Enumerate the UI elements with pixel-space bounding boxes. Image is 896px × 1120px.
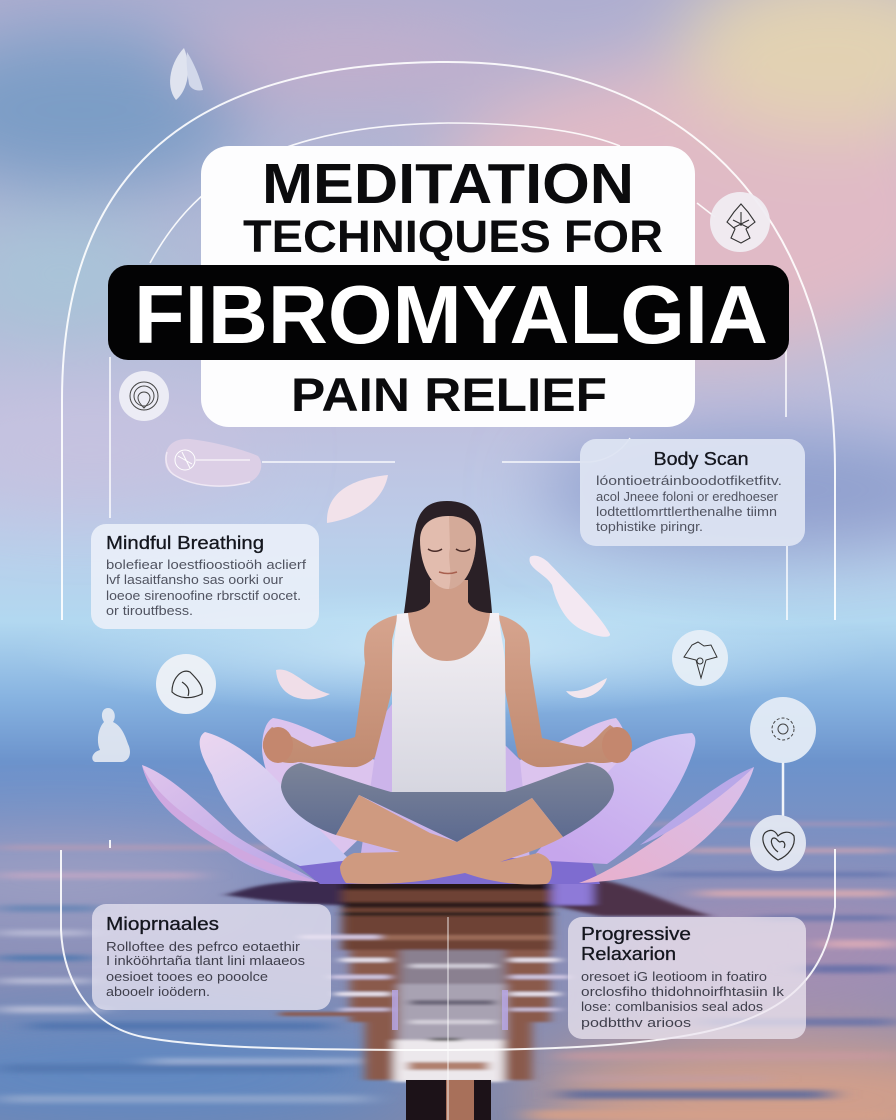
body text: podbtthv arioos xyxy=(581,1015,692,1030)
body text: abooelr ioödern. xyxy=(106,984,210,999)
body text: Rolloftee des pefrco eotaethir xyxy=(106,939,301,954)
shorts xyxy=(281,763,614,842)
body text: orclosfiho thidohnoirfhtasiin Ik xyxy=(581,984,785,999)
body text: lodtettlomrttlerthenalhe tiimn xyxy=(596,504,777,519)
petal: upper left xyxy=(327,475,388,523)
petal: far right xyxy=(579,767,754,883)
title line: pain relief: PAIN RELIEF xyxy=(291,368,607,421)
panel: mioprnaales xyxy=(92,904,331,1010)
icon: heart circle right xyxy=(750,815,806,871)
right hand xyxy=(602,727,632,763)
icon: shield circle left xyxy=(119,371,169,421)
water ripples xyxy=(0,822,896,1120)
icon: sun circle right xyxy=(750,697,816,763)
petal: back right xyxy=(495,718,628,857)
petal: mid right xyxy=(530,733,695,864)
crossed legs xyxy=(336,795,563,885)
body text xyxy=(106,939,306,999)
petal: far left xyxy=(142,765,318,882)
title panel xyxy=(201,146,695,427)
hair xyxy=(404,501,492,613)
petal: center xyxy=(360,700,530,860)
title line: fibromyalgia: FIBROMYALGIA xyxy=(134,268,768,361)
petal: back left xyxy=(262,718,400,857)
left arm xyxy=(263,615,398,767)
panel: progressive relaxation xyxy=(568,917,806,1039)
body text: lvf lasaitfansho sas oorki our xyxy=(106,572,284,587)
heading: Mindful Breathing xyxy=(106,532,264,553)
face xyxy=(420,516,476,589)
lotus flower xyxy=(142,700,754,884)
heading: Relaxarion xyxy=(581,943,676,964)
petal: mid left xyxy=(276,670,330,699)
body text xyxy=(596,473,782,534)
petal: mid left xyxy=(200,732,350,866)
panel: mindful breathing xyxy=(91,524,319,629)
heading: Progressive xyxy=(581,923,691,944)
meditating woman xyxy=(263,501,632,885)
icon: crown circle right xyxy=(672,630,728,686)
body text: tophistike piringr. xyxy=(596,519,703,534)
body text xyxy=(581,969,785,1030)
body text: oresoet iG leotioom in foatiro xyxy=(581,969,767,984)
reflection of the figure in the water xyxy=(225,880,712,1120)
body text: oesioet tooes eo pooolce xyxy=(106,969,268,984)
eyes and mouth xyxy=(428,549,470,574)
body text: lose: comlbanisios seal ados xyxy=(581,999,764,1014)
icon: flower circle top right xyxy=(710,192,770,252)
body text: loeoe sirenoofine rbrsctif oocet. xyxy=(106,588,301,603)
petal: upper right xyxy=(529,556,610,637)
body text: I inkööhrtaña tlant lini mlaaeos xyxy=(106,953,306,968)
body text: bolefiear loestfioostioöh aclierf xyxy=(106,557,306,572)
body text: or tiroutfbess. xyxy=(106,603,193,618)
body text: acol Jneee foloni or eredhoeser xyxy=(596,489,779,504)
left hand xyxy=(263,727,293,763)
tank top xyxy=(392,613,506,792)
heading: Body Scan xyxy=(654,449,748,469)
title block xyxy=(108,146,789,427)
right arm xyxy=(498,615,632,767)
title line: meditation: MEDITATION xyxy=(262,152,634,216)
panel: body scan xyxy=(580,439,805,546)
neck and chest xyxy=(404,580,492,665)
body text xyxy=(106,557,306,618)
body text: lóontioetráinboodotfiketfitv. xyxy=(596,473,782,488)
petal: mid right xyxy=(566,678,607,698)
heading: Mioprnaales xyxy=(106,914,219,934)
purple base xyxy=(293,858,600,884)
icon: lavender pebble xyxy=(165,439,261,486)
icon: figure silhouette xyxy=(92,708,130,762)
icon: leaves top left xyxy=(170,48,203,100)
black banner xyxy=(108,265,789,360)
icon: lotus circle left xyxy=(156,654,216,714)
title line: techniques for: TECHNIQUES FOR xyxy=(243,211,663,262)
